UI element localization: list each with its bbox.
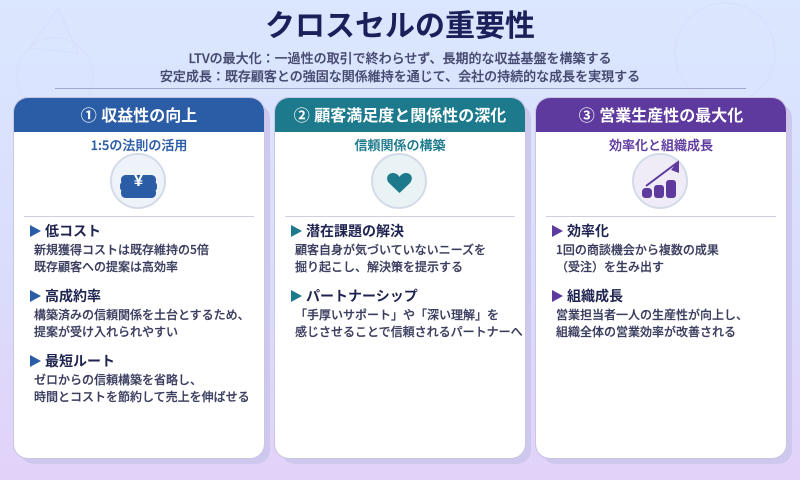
- item: high conversion: [30, 288, 250, 340]
- panel heading: ② 顧客満足度と関係性の深化: [294, 108, 506, 125]
- panel: profitability: [14, 98, 264, 458]
- item: high conversion: 構築済みの信頼関係を土台とするため、: [34, 306, 250, 323]
- item: organizational growth: 営業担当者一人の生産性が向上し、: [556, 306, 748, 323]
- item: partnership: パートナーシップ: [306, 288, 418, 304]
- panel subheading: 効率化と組織成長: [609, 135, 713, 154]
- panel: sales productivity: [536, 98, 786, 458]
- item: high conversion: 高成約率: [45, 288, 101, 304]
- panel heading: [14, 98, 264, 132]
- item: latent issues: [291, 223, 486, 275]
- item: efficiency: （受注）を生み出す: [556, 258, 664, 275]
- item: efficiency: 1回の商談機会から複数の成果: [556, 241, 719, 258]
- item: efficiency: 効率化: [567, 223, 609, 239]
- item: partnership: 感じさせることで信頼されるパートナーへ: [295, 323, 523, 340]
- item: latent issues: 掘り起こし、解決策を提示する: [295, 258, 463, 275]
- item: organizational growth: 組織成長: [567, 288, 623, 304]
- panel heading: ③ 営業生産性の最大化: [579, 108, 743, 125]
- panel heading: [536, 98, 786, 132]
- subtitle line 2: 安定成長：既存顧客との強固な関係維持を通じて、会社の持続的な成長を実現する: [160, 66, 640, 85]
- item: latent issues: 潜在課題の解決: [306, 223, 404, 239]
- panel heading: [275, 98, 525, 132]
- item: efficiency: [552, 223, 719, 275]
- title: クロスセルの重要性: [265, 10, 535, 43]
- icon: heart: [371, 153, 427, 209]
- panel: customer satisfaction: [275, 98, 525, 458]
- item: low cost: 低コスト: [45, 223, 101, 239]
- item: latent issues: 顧客自身が気づいていないニーズを: [295, 241, 486, 258]
- item: low cost: [30, 223, 209, 275]
- item: low cost: 新規獲得コストは既存維持の5倍: [34, 241, 209, 258]
- panel heading: ① 収益性の向上: [81, 108, 197, 125]
- subtitle line 1: LTVの最大化：一過性の取引で終わらせず、長期的な収益基盤を構築する: [188, 48, 612, 67]
- item: organizational growth: 組織全体の営業効率が改善される: [556, 323, 736, 340]
- panel subheading: 信頼関係の構築: [354, 135, 446, 154]
- item: shortest route: ゼロからの信頼構築を省略し、: [34, 371, 202, 388]
- panel subheading: 1:5の法則の活用: [91, 135, 187, 154]
- item: partnership: [291, 288, 523, 340]
- item: shortest route: 最短ルート: [45, 353, 115, 369]
- icon: yen coins: ¥: [134, 171, 144, 190]
- item: shortest route: 時間とコストを節約して売上を伸ばせる: [34, 388, 250, 405]
- item: partnership: 「手厚いサポート」や「深い理解」を: [295, 306, 499, 323]
- item: organizational growth: [552, 288, 748, 340]
- item: high conversion: 提案が受け入れられやすい: [34, 323, 178, 340]
- item: low cost: 既存顧客への提案は高効率: [34, 258, 178, 275]
- icon: yen coins: [110, 153, 166, 209]
- item: shortest route: [30, 353, 250, 405]
- icon: growth chart: [632, 153, 688, 209]
